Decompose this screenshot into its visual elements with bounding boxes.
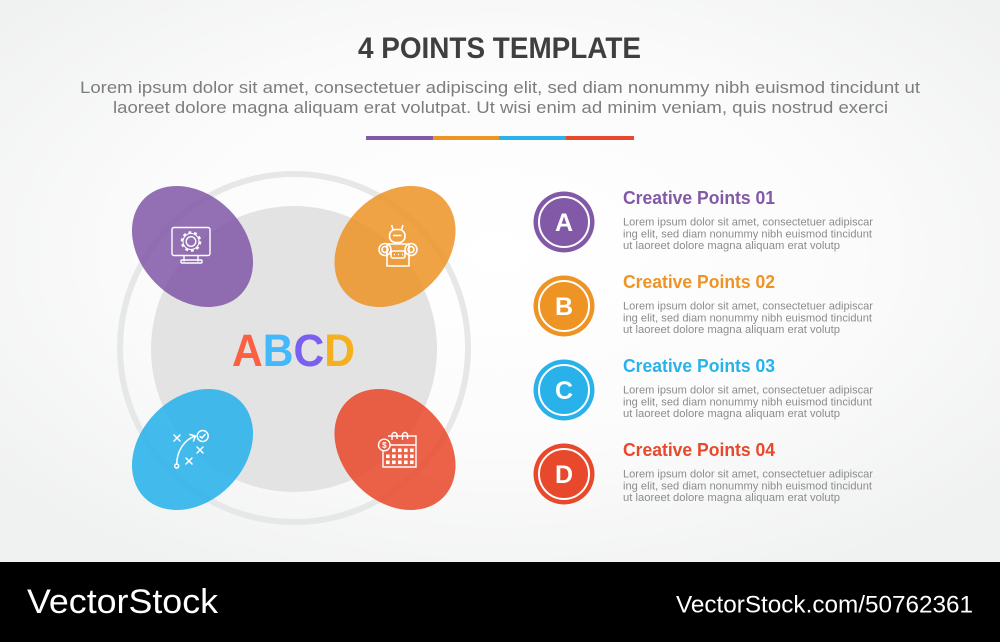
point A row	[534, 188, 873, 252]
body 04	[623, 468, 873, 504]
title: 4 POINTS TEMPLATE	[358, 32, 641, 65]
footer image id: VectorStock.com/50762361	[676, 592, 973, 618]
body 04: ut laoreet dolore magna aliquam erat volutp	[623, 492, 840, 504]
body 03: ut laoreet dolore magna aliquam erat volutp	[623, 408, 840, 420]
icon: calendar with dollar: $	[382, 441, 387, 450]
icon: robot	[379, 225, 417, 266]
badge C	[534, 360, 594, 420]
footer logo text: VectorStock	[27, 583, 219, 621]
watermark footer band	[0, 562, 1000, 642]
body 01: ut laoreet dolore magna aliquam erat volutp	[623, 240, 840, 252]
point C row	[534, 356, 873, 420]
body 01: Lorem ipsum dolor sit amet, consectetuer adipiscar	[623, 216, 873, 228]
icon: monitor with gear	[172, 228, 210, 263]
badge B: B	[555, 293, 573, 321]
badge B	[534, 276, 594, 336]
point B row	[534, 272, 873, 336]
point D row	[534, 440, 873, 504]
subtitle text block	[80, 78, 920, 117]
body 02: ut laoreet dolore magna aliquam erat volutp	[623, 324, 840, 336]
petal: purple	[108, 162, 277, 331]
body 03: ing elit, sed diam nonummy nibh euismod tincidunt	[623, 396, 872, 408]
badge A: A	[555, 209, 573, 237]
outer ring	[120, 174, 468, 522]
diagram: circle with four petals	[108, 162, 480, 534]
body 03	[623, 384, 873, 420]
heading 02: Creative Points 02	[623, 272, 775, 292]
body 04: Lorem ipsum dolor sit amet, consectetuer adipiscar	[623, 468, 873, 480]
body 01: ing elit, sed diam nonummy nibh euismod tincidunt	[623, 228, 872, 240]
heading 03: Creative Points 03	[623, 356, 775, 376]
icon: calendar with dollar	[378, 432, 416, 467]
petal: red	[310, 365, 480, 534]
badge A	[534, 192, 594, 252]
body 03: Lorem ipsum dolor sit amet, consectetuer adipiscar	[623, 384, 873, 396]
petal: orange	[310, 162, 480, 331]
heading 01: Creative Points 01	[623, 188, 775, 208]
badge C: C	[555, 377, 573, 405]
body 01	[623, 216, 873, 252]
heading 04: Creative Points 04	[623, 440, 775, 460]
body 02: ing elit, sed diam nonummy nibh euismod tincidunt	[623, 312, 872, 324]
subtitle text block: laoreet dolore magna aliquam erat volutpat. Ut wisi enim ad minim veniam, quis nostrud exerci	[113, 98, 888, 117]
badge D: D	[555, 461, 573, 489]
center label ABCD: ABCD	[232, 325, 355, 376]
body 02: Lorem ipsum dolor sit amet, consectetuer adipiscar	[623, 300, 873, 312]
body 02	[623, 300, 873, 336]
subtitle text block: Lorem ipsum dolor sit amet, consectetuer adipiscing elit, sed diam nonummy nibh euismod tincidunt ut	[80, 78, 920, 97]
inner circle	[151, 206, 437, 492]
icon: strategy play	[174, 430, 208, 468]
body 04: ing elit, sed diam nonummy nibh euismod tincidunt	[623, 480, 872, 492]
petal: blue	[108, 365, 277, 534]
badge D	[534, 444, 594, 504]
title divider	[366, 136, 634, 140]
